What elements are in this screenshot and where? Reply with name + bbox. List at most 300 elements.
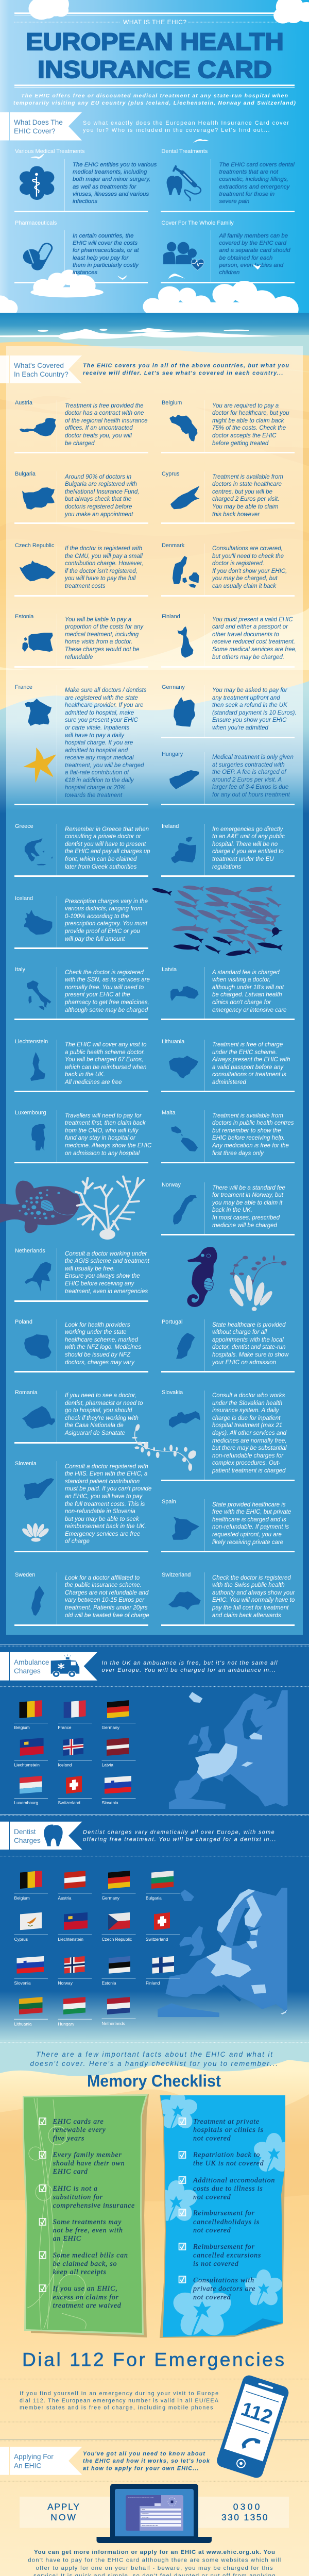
check item: private doctors are [193,2285,255,2293]
rule above applying [0,2439,309,2441]
text: instances [73,269,97,276]
flag: Iceland [58,1738,92,1767]
title: INSURANCE CARD [38,56,272,83]
text: The EHIC card covers dental [219,162,295,168]
text: doctor for healthcare, but you [212,410,289,416]
text: the CMU, you will pay a small [65,553,143,560]
foam [0,328,280,340]
text [65,899,148,942]
map [169,1056,198,1078]
banner: ambulance charges: Ambulance [14,1658,49,1666]
text: should be issued by NFZ [65,1352,130,1358]
section intro: applying [83,2451,210,2472]
text: contribution charge. However, [65,561,143,567]
map [24,1478,54,1500]
banner: what does the EHIC cover: EHIC Cover? [14,127,56,135]
text: a flat-rate contribution of [65,770,129,776]
text: Prescription charges vary in the [65,899,148,905]
text: Check the doctor is registered [212,1575,291,1581]
flag: Luxembourg [14,1776,48,1805]
flag: Switzerland [58,1776,92,1805]
name: Portugal [162,1319,183,1325]
text: hospital charge or 20% [65,785,126,791]
kicker: what is the EHIC: WHAT IS THE EHIC? [123,19,186,26]
flag: Norway [58,1956,92,1986]
emergency text: member states and is free of charge, including mobile phones [20,2405,213,2411]
flags: ambulance charges [14,1700,136,1805]
check item: Some medical bills can [53,2251,128,2260]
map [25,699,52,726]
text [212,1321,288,1366]
text: the AGIS scheme and treatment [65,1258,149,1264]
text: Treatment is free provided the [65,403,144,409]
text: normally free. You will need to [65,985,144,991]
country: Spain [161,1499,295,1551]
text [65,826,150,870]
note: what is not covered [160,2095,285,2338]
text: be charged. Latvian health [212,992,282,998]
text [212,1392,286,1475]
text: Ensure you show your EHIC [212,717,286,723]
text: of the regional health insurance [65,418,147,424]
check item [39,2118,106,2142]
country: Austria [14,400,148,452]
flag: Lithuania [14,1997,48,2027]
text [212,687,297,731]
text: medicine. Always show the EHIC [65,1143,151,1149]
text: doctor treats you, you will [65,433,132,439]
text: healthcare scheme, marked [65,1337,138,1343]
text: or carte vitale. Inpatients [65,725,129,731]
note: what is covered [23,2094,149,2337]
EHIC card [126,2495,183,2531]
flag: France [58,1700,92,1730]
dunes [0,2089,309,2201]
name: Romania [15,1389,38,1396]
check item: be claimed back, so [53,2260,117,2268]
map [25,1262,52,1292]
text: State provided healthcare is [212,1502,286,1508]
text: of charge [65,1538,90,1545]
check item: substitution for [53,2194,103,2201]
check item: treatment are waived [53,2302,122,2310]
section intro: cover: you for? Who is included in the coverage? Let's find out... [83,127,270,133]
text: EHIC. You will normally have to [212,1597,295,1603]
heading: Dental Treatments [161,148,208,155]
text: regulations [212,864,241,870]
text: towards the treatment [65,792,122,799]
flag: Latvia [102,1738,136,1767]
sand wash line [60,358,309,372]
text: Consultations are covered, [212,546,283,552]
check item: is not covered [193,2260,239,2268]
text: the EHIC and pay all charges up [65,849,150,855]
school of fish [151,885,283,958]
text: around 2 Euros per visit. A [212,777,282,783]
check item: renewable every [53,2126,106,2134]
sand [0,342,309,721]
flag: Germany: Germany [102,1725,120,1730]
heading: Pharmaceuticals [15,220,57,226]
text: check if they're working with [65,1415,139,1421]
country: Poland [14,1319,148,1371]
name: France [15,684,32,690]
text: EHIC before receiving any [65,1281,134,1287]
text: charge if you are entitled to [212,849,284,855]
text: the public insurance scheme. [65,1582,142,1588]
country: Liechtenstein [14,1040,148,1091]
name: Czech Republic [15,543,54,549]
text: when you're admitted [212,725,268,731]
text: but you'll need to check the [212,553,284,560]
text: a valid passport before any [212,1064,283,1071]
text: must be paid. If you can't provide [65,1486,151,1492]
text: refundable [65,654,93,660]
apply now panel: APPLY [47,2502,79,2512]
text: proportion of the costs for any [65,624,143,630]
text: patient treatment is charged [212,1468,286,1474]
check item: cancelled excursions [193,2251,261,2260]
text: All medicines are free [65,1079,122,1086]
name: Denmark [162,543,184,549]
text: receive reduced cost treatment. [212,639,295,645]
text: Ensure you always show the [65,1273,140,1279]
text: a public health scheme doctor. [65,1049,145,1056]
sand ripples [0,396,309,559]
flag: Lithuania: Lithuania [14,2022,32,2027]
flag: Austria [58,1871,92,1901]
text: Im emergencies go directly [212,826,283,833]
check item: Reimbursement for [193,2243,255,2251]
text: be charged [65,440,95,447]
text: you will have to pay the full [65,575,135,582]
check item [179,2243,261,2268]
text: charge is due for inpatient [212,1415,280,1421]
text: back in the UK. [212,1207,252,1213]
country: Bulgaria [14,471,148,523]
text: Look for a doctor affiliated to [65,1575,140,1581]
banner: dentist charges: Charges [14,1837,41,1844]
checklist intro: doesn't cover. Here's a handy checklist for you to remember... [30,2060,278,2067]
EHIC card: 9001 0001 001 001 001 [142,2524,158,2527]
text: admitted to hospital, make [65,710,134,716]
text: if the doctor isn't registered, [65,568,138,574]
country: Finland [161,614,295,667]
text: without charge for all [212,1329,267,1335]
country: Germany [161,685,295,737]
text: Travellers will need to pay for [65,1113,142,1119]
text: The EHIC will cover any visit to [65,1042,146,1048]
flag: Switzerland: Switzerland [146,1937,168,1942]
text [65,1250,149,1295]
check item [39,2251,128,2276]
name: Sweden [15,1571,35,1578]
flag: Latvia: Latvia [102,1762,113,1767]
flag: Switzerland: Switzerland [58,1800,80,1805]
text [65,403,147,447]
text: will have to pay a daily [65,733,124,739]
EHIC card: ANDREW [142,2513,149,2515]
starfish [23,748,56,783]
check item: keep all receipts [53,2268,107,2276]
map [177,626,194,658]
big fish [0,1181,80,1233]
text: dentist you will have to present [65,841,146,848]
text: from the CMO, who will fully [65,1128,139,1134]
text: If you don't show your EHIC, [212,568,287,574]
map [20,561,56,581]
text: Charges are not refundable and [65,1590,148,1596]
text: the full treatment costs. This is [65,1501,145,1507]
check item: an EHIC [53,2235,81,2243]
check item: not covered [193,2227,231,2234]
icon: pills [23,243,53,270]
country: Sweden [14,1572,148,1625]
country: Estonia [14,614,148,667]
text: cosmetic, including fillings, [219,176,288,182]
flag: Switzerland [146,1912,180,1942]
shallow water [0,335,309,355]
section intro: ambulance: In the UK an ambulance is free, but it's not the same all [102,1660,278,1666]
flag: France: France [58,1725,72,1730]
country: Switzerland [161,1572,295,1625]
seahorse [187,1247,217,1307]
country: Netherlands [14,1248,148,1301]
text [65,687,147,799]
banner: what's covered: What's Covered [14,362,64,369]
EHIC card: EUROPEAN HEALTH INSURANCE CARD [128,2497,154,2499]
text: doctor, dentist and state-run [212,1344,286,1350]
dotted rules [0,2379,309,2422]
emergency text: If you find yourself in an emergency during your visit to Europe [20,2391,218,2397]
country: Latvia [161,967,295,1019]
text: clinics don't charge for [212,999,271,1006]
check item: comprehensive insurance [53,2202,135,2210]
text: All family members can be [219,233,288,239]
flag: Slovenia: Slovenia [14,1980,31,1986]
text: will usually be free. [65,1266,115,1272]
map [24,910,53,935]
banner: applying for an EHIC: Applying For [14,2453,54,2461]
text: doctor accepts the EHIC [212,433,277,439]
flag: Slovenia [14,1956,48,1986]
text: you make an appointment [65,512,133,518]
text [65,1112,151,1157]
text [212,403,289,447]
text: under the Slovakian health [212,1400,282,1406]
check item: cancelledholidays is [193,2218,260,2226]
text: when visiting a doctor, [212,977,270,983]
text: at surgeries contracted with [212,762,285,768]
text [212,754,294,798]
text [212,970,286,1013]
text: which can be reimbursed when [65,1064,147,1071]
heading: Various Medical Treatments [15,148,85,155]
text: various districts, ranging from [65,906,142,912]
text: hospital treatment (max 21 [212,1422,282,1429]
rule: checklist top [0,2041,309,2043]
text: Bulgaria are registered with [65,481,137,487]
text: authority and always show your [212,1590,295,1596]
text: Consult a doctor registered with [65,1464,148,1470]
text [218,233,290,276]
text: the HIIS. Even with the EHIC, a [65,1471,147,1477]
EHIC card: 9001 [142,2509,145,2511]
text: Treatment is available from [212,1113,283,1119]
banner: applying for an EHIC [0,2447,82,2475]
country: Czech Republic [14,543,148,596]
map [169,770,199,789]
check item: costs due to illness is [193,2185,263,2193]
text: sure you present your EHIC [65,717,138,723]
text: charged 2 Euros per visit. [212,496,279,502]
text: can usually claim it back [212,583,276,589]
text: children [219,269,239,276]
phone 112: 112 [238,2398,275,2429]
text: them in particularly costly [73,262,139,268]
lower beach [0,2060,309,2576]
rule: dentist top [0,1814,309,1816]
name: Belgium [162,400,182,406]
section intro: applying: at how to apply for your own EHIC... [83,2466,199,2472]
name: Liechtenstein [15,1039,48,1045]
text: hospitals. Make sure to show [212,1352,288,1358]
banner: applying for an EHIC: An EHIC [14,2462,41,2470]
text: 75% of the costs. Check the [212,425,286,431]
check item: the UK is not covered [193,2160,264,2167]
divider dotted [0,1686,309,1687]
map [22,1406,55,1429]
flag: Czech Republic: Czech Republic [102,1937,132,1942]
text: non-refundable charges for [212,1453,283,1459]
panel: whole family [161,230,295,282]
text: healthcare is charged and is [212,1517,286,1523]
flag: Cyprus: Cyprus [14,1937,28,1942]
text [73,233,139,276]
text [65,1392,143,1437]
heading: dial 112: Dial 112 For Emergencies [22,2349,284,2370]
text: other travel documents to [212,632,279,638]
text [212,617,297,660]
phone number panel [198,2497,289,2528]
name: Germany [162,684,185,690]
text [212,826,285,870]
text: A standard fee is charged [212,970,280,976]
text: the OEP. A fee is charged of [212,769,286,775]
map [173,1195,197,1225]
name: Slovenia [15,1460,37,1466]
map [172,1517,199,1540]
check item: EHIC is not a [53,2185,98,2193]
flag: Norway: Norway [58,1980,73,1986]
emergency text [20,2391,219,2411]
section intro: cover: So what exactly does the European Health Insurance Card cover [83,120,289,126]
name: Luxembourg [15,1110,46,1116]
text: extractions and emergency [219,184,289,190]
text: for any out of hours treatment [212,792,290,798]
text: doctor is registered. [212,561,264,567]
flag: Austria: Austria [58,1895,72,1901]
text: you may be able to claim it [212,1200,282,1206]
check item: Treatment at private [193,2118,260,2126]
banner: what does the EHIC cover: What Does The [14,118,63,126]
flag: Hungary [58,1997,92,2027]
text: The EHIC entitles you to various [73,162,157,168]
flags: dentist charges [14,1871,180,2027]
check item: should have their own [53,2160,125,2167]
hibiscus flowers [161,2095,285,2336]
text: but you may be able to seek [65,1516,139,1522]
text: your EHIC on admission [212,1360,276,1366]
text: this back however [212,512,260,518]
text: for treament in Norway, but [212,1192,283,1198]
text: larger fee of 3-4 Euros is due [212,784,288,790]
text: as well as treatments for [73,184,136,190]
map [22,633,53,652]
text: are registered with the state [65,695,138,701]
map [176,1333,195,1359]
section intro: countries: receive will differ. Let's see what's covered in each country... [83,370,283,376]
text: free with the EHIC, but private [212,1509,291,1515]
map [170,486,200,509]
name: Cyprus [162,471,179,477]
section intro: ambulance: over Europe. You will be charged for an ambulance in... [102,1667,276,1673]
text: insurance system. A daily [212,1408,279,1414]
map [169,415,198,442]
text: with the Swiss public health [212,1582,285,1588]
text: You must present a valid EHIC [212,617,293,623]
text: provide proof of EHIC or you [65,928,140,935]
check item: not covered [193,2294,231,2301]
text: old will be treated free of charge [65,1613,149,1619]
text: You are required to pay a [212,403,279,409]
text: first three days only [212,1150,264,1157]
text: an EHIC, you will have to pay [65,1494,142,1500]
text: emergency or intensive care [212,1007,286,1013]
flag: Czech Republic [102,1912,136,1942]
name: Switzerland [162,1571,191,1578]
text: and claim back afterwards [212,1613,281,1619]
map [20,418,56,436]
country: Cyprus [161,471,295,523]
phone number panel: 330 1350 [221,2512,268,2522]
text: non-refundable in Slovenia [65,1509,135,1515]
text: might be able to claim back [212,418,284,424]
text: although under 18's will not [212,985,284,991]
flag: Germany [102,1700,136,1730]
banner: what does the EHIC cover [0,112,82,140]
check item [39,2218,123,2243]
text: consultations or treatment is [212,1072,286,1078]
text: appointments with the local [212,1337,284,1343]
text: administered [212,1079,246,1086]
text: fund any stay in hospital or [65,1135,135,1141]
flag: Liechtenstein [58,1912,92,1942]
text: You will be liable to pay a [65,617,131,623]
divider dotted [0,1856,309,1857]
sea [0,313,309,338]
text: later from Greek authorities [65,864,136,870]
intro text: The EHIC offers free or discounted medical treatment at any state-run hospital when [21,93,288,99]
name: Spain [162,1498,176,1504]
shell [21,1523,50,1542]
text: These charges would not be [65,647,139,653]
check item [39,2151,125,2176]
text [65,1321,141,1366]
country: Hungary [161,752,295,805]
text [65,1574,149,1619]
sky [0,0,309,313]
